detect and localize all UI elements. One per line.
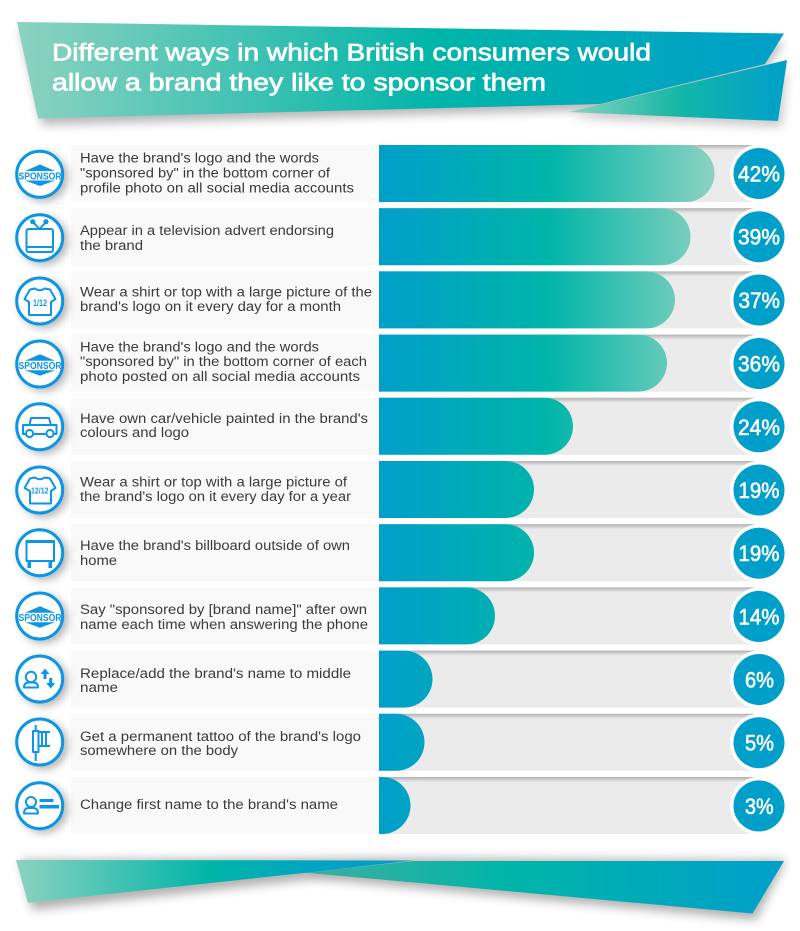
bar 19% <box>379 524 534 581</box>
icon: car <box>17 404 63 450</box>
label: Replace/add the brand's name to middle <box>80 666 351 681</box>
label: name each time when answering the phone <box>80 617 368 632</box>
icon: t-shirt 1/12 <box>17 278 63 324</box>
header banner <box>17 22 787 127</box>
icon: television <box>17 215 63 261</box>
icon: sponsor <box>17 593 63 639</box>
value 36%: 36% <box>738 352 780 376</box>
label: brand's logo on it every day for a month <box>80 299 341 314</box>
label: Get a permanent tattoo of the brand's logo <box>80 729 361 744</box>
row 8: say sponsored by on the phone, 14% <box>17 587 788 645</box>
icon: t-shirt 12/12: 12/12 <box>31 486 49 496</box>
label: "sponsored by" in the bottom corner of each <box>80 354 367 369</box>
value 37%: 37% <box>738 288 780 313</box>
value 42%: 42% <box>738 162 780 186</box>
value 6%: 6% <box>745 668 774 692</box>
value 5% <box>730 714 788 772</box>
icon: person with name bars <box>17 783 63 829</box>
footer banner <box>16 858 786 920</box>
title: allow a brand they like to sponsor them <box>52 70 546 96</box>
value 6% <box>730 650 788 708</box>
value 39%: 39% <box>738 225 780 250</box>
row 7: billboard, 19% <box>17 524 788 582</box>
label: colours and logo <box>80 425 189 440</box>
row 6: shirt for a year, 19% <box>17 461 788 519</box>
value 14% <box>730 587 788 645</box>
bar 5% <box>379 714 424 771</box>
row 4: sponsor logo on each photo, 36% <box>17 334 788 392</box>
value 19% <box>730 461 788 519</box>
bar 39% <box>379 208 690 265</box>
icon: t-shirt 1/12: 1/12 <box>33 298 47 308</box>
value 24% <box>730 398 788 456</box>
icon: sponsor: SPONSOR <box>18 360 62 372</box>
label: the brand's logo on it every day for a year <box>80 489 352 504</box>
value 37% <box>730 271 788 329</box>
label: Change first name to the brand's name <box>80 797 338 812</box>
icon: person with swap arrows <box>17 656 63 702</box>
value 19% <box>730 524 788 582</box>
value 5%: 5% <box>745 731 774 756</box>
bar 36% <box>379 335 667 392</box>
icon: sponsor: SPONSOR <box>18 612 62 624</box>
label: Appear in a television advert endorsing <box>80 223 334 238</box>
row 11: first name, 3% <box>17 777 788 835</box>
label: Say "sponsored by [brand name]" after own <box>80 602 367 617</box>
value 3%: 3% <box>745 794 774 819</box>
bar 3% <box>379 777 410 834</box>
label: "sponsored by" in the bottom corner of <box>80 166 330 181</box>
bar 6% <box>379 651 432 708</box>
label: profile photo on all social media accounts <box>80 181 354 196</box>
label: Have the brand's billboard outside of own <box>80 538 350 553</box>
value 3% <box>730 777 788 835</box>
label: the brand <box>80 238 143 253</box>
label: Have the brand's logo and the words <box>80 151 319 166</box>
row 3: shirt for a month, 37% <box>17 271 788 329</box>
icon: sponsor <box>17 341 63 387</box>
value 24%: 24% <box>738 415 780 440</box>
row 5: car painted, 24% <box>17 398 788 456</box>
row 9: middle name, 6% <box>17 650 788 708</box>
label: Wear a shirt or top with a large picture of <box>80 475 347 490</box>
label: Have own car/vehicle painted in the brand's <box>80 411 368 426</box>
bar 42% <box>379 145 714 202</box>
icon: sponsor: SPONSOR <box>18 170 62 182</box>
label: name <box>80 680 118 695</box>
label: Wear a shirt or top with a large picture of the <box>80 285 372 300</box>
label: Have the brand's logo and the words <box>80 340 319 355</box>
icon: tattoo machine <box>17 719 63 765</box>
value 14%: 14% <box>738 604 780 629</box>
value 39% <box>730 208 788 266</box>
icon: sponsor <box>17 151 63 197</box>
title: Different ways in which British consumers would <box>52 40 651 66</box>
value 36% <box>730 334 788 392</box>
value 42% <box>730 144 788 202</box>
label: somewhere on the body <box>80 743 238 758</box>
value 19%: 19% <box>738 478 780 503</box>
bar 37% <box>379 271 675 328</box>
bar 19% <box>379 461 534 518</box>
icon: t-shirt 12/12 <box>17 467 63 513</box>
icon: billboard <box>17 530 63 576</box>
label: home <box>80 553 117 568</box>
label: photo posted on all social media accounts <box>80 369 360 384</box>
row 2: television advert, 39% <box>17 208 788 266</box>
value 19%: 19% <box>738 541 780 566</box>
row 1: sponsor logo on profile photo, 42% <box>17 144 788 202</box>
bar 14% <box>379 587 495 644</box>
bar 24% <box>379 398 573 455</box>
row 10: tattoo, 5% <box>17 714 788 772</box>
